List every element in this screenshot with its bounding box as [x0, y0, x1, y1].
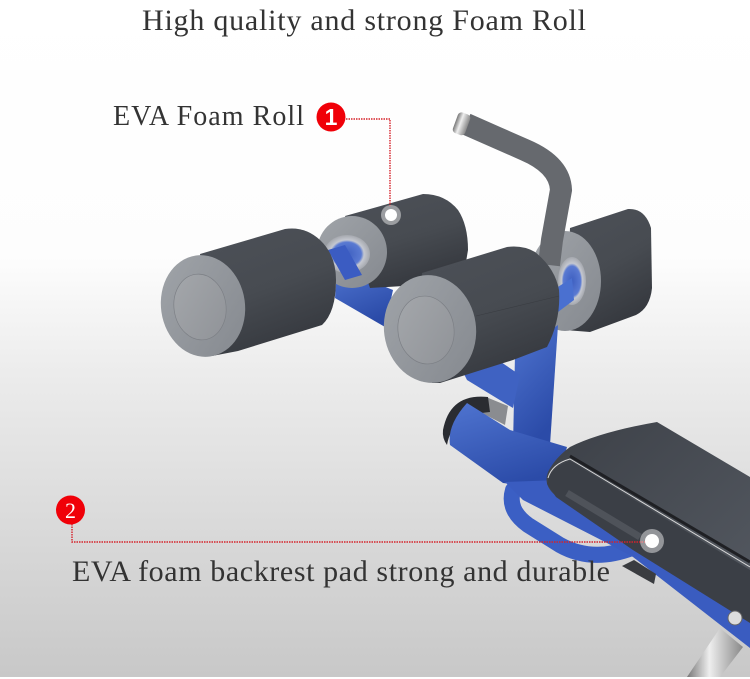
callout 1 target dot — [381, 205, 401, 225]
callout 2 target dot — [640, 529, 664, 553]
blue diagonal strut — [462, 358, 520, 408]
dark bracket — [622, 560, 656, 584]
callout 2: backrest pad — [56, 496, 664, 588]
callout 2 label: EVA foam backrest pad strong and durable — [72, 555, 610, 588]
centre back roller — [317, 194, 468, 288]
right back roller — [529, 209, 652, 332]
callout 2 leader line — [72, 524, 645, 542]
handle bar — [452, 111, 561, 265]
callout 1 badge: 1 — [325, 104, 338, 130]
right front roller — [377, 247, 559, 389]
chrome leg — [687, 628, 743, 677]
callout 1: EVA Foam Roll — [113, 101, 401, 225]
left front roller — [154, 228, 336, 362]
callout 1 badge — [316, 102, 346, 132]
blue cross tube — [335, 267, 393, 327]
callout 2 badge: 2 — [65, 498, 76, 523]
product illustration: bench — [154, 111, 750, 677]
blue main tube with end cap — [443, 397, 567, 490]
callout 1 label: EVA Foam Roll — [113, 101, 304, 132]
callout 2 badge — [56, 496, 85, 524]
title: High quality and strong Foam Roll — [142, 4, 586, 37]
callout 1 leader line — [346, 119, 390, 206]
frame bolt — [728, 611, 742, 625]
blue lower rail — [505, 480, 750, 648]
blue handle loop — [512, 490, 632, 555]
blue upright post — [513, 325, 558, 445]
backrest pad — [547, 422, 750, 623]
